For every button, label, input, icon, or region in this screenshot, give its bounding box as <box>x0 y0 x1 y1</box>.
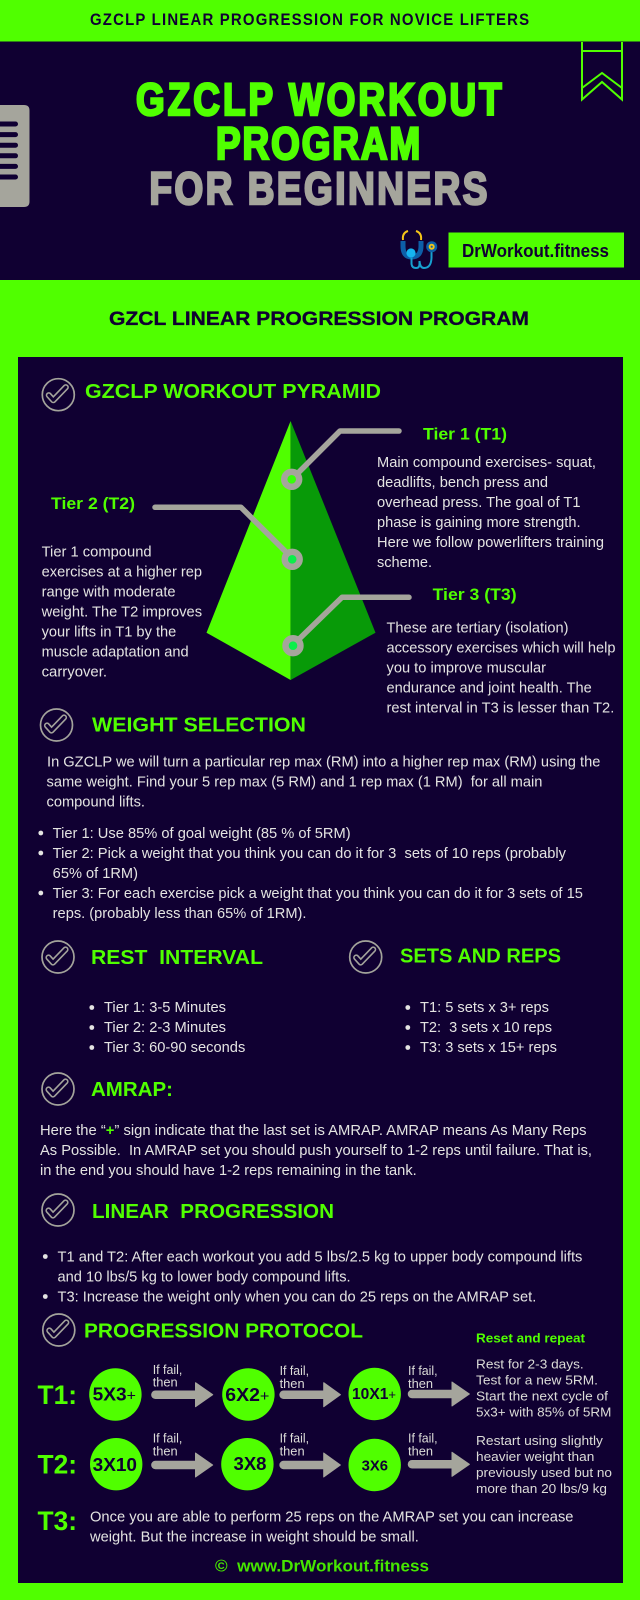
title: PROGRAM <box>216 118 420 169</box>
connector: tier 1 <box>284 431 399 487</box>
heading: AMRAP: AMRAP: <box>91 1078 173 1101</box>
section: rest interval <box>42 941 263 1056</box>
text: T2 restart: more than 20 lbs/9 kg <box>476 1481 607 1496</box>
list: rest times: Tier 3: 60-90 seconds <box>104 1040 245 1056</box>
step: 3X10 <box>90 1438 142 1490</box>
step: 3X8: 3X8 <box>234 1454 266 1474</box>
list: linear progression rules <box>43 1249 582 1305</box>
icon: check circle <box>350 941 382 973</box>
top banner <box>0 0 640 42</box>
list: rest times: Tier 2: 2-3 Minutes <box>104 1020 226 1036</box>
arrow: if fail 4: then <box>153 1444 178 1459</box>
text: tier 1 description: overhead press. The goal of T1 <box>377 495 581 511</box>
list: tier weights: Tier 2: Pick a weight that you think you can do it for 3 sets of 10 reps (probably <box>53 846 567 862</box>
section: AMRAP <box>40 1073 592 1179</box>
text: T2 restart: previously used but no <box>476 1465 612 1480</box>
list: tier weights: Tier 3: For each exercise pick a weight that you think you can do it for 3 sets of 15 <box>53 886 583 902</box>
text: tier 2 description: exercises at a higher rep <box>42 565 202 581</box>
arrow: if fail 1: then <box>153 1375 178 1390</box>
step: 3X10: 3X10 <box>93 1454 137 1475</box>
list: tier weights: reps. (probably less than 65% of 1RM). <box>53 906 307 922</box>
text: AMRAP explanation <box>40 1123 592 1179</box>
label: T3: T3: <box>38 1506 77 1536</box>
text: tier 2 description: carryover. <box>42 665 107 681</box>
website badge <box>448 232 624 268</box>
list: linear progression rules: and 10 lbs/5 kg to lower body compound lifts. <box>58 1269 351 1285</box>
text: T1 reset: Test for a new 5RM. <box>476 1373 598 1388</box>
list: sets and reps: T3: 3 sets x 15+ reps <box>420 1040 557 1056</box>
top banner: GZCLP LINEAR PROGRESSION FOR NOVICE LIFTERS <box>90 11 529 29</box>
subtitle heading: GZCL LINEAR PROGRESSION PROGRAM <box>109 308 529 330</box>
footer credit: © www.DrWorkout.fitness <box>215 1558 429 1576</box>
text: tier 2 description: Tier 1 compound <box>42 545 152 561</box>
connector: tier 2 <box>155 507 300 567</box>
step: 6X2+: 6X2+ <box>225 1385 270 1405</box>
arrow: if fail 3 <box>408 1363 469 1406</box>
arrow: if fail 3: If fail, <box>408 1363 438 1378</box>
list: linear progression rules: T3: Increase the weight only when you can do 25 reps on the AMRAP set. <box>58 1289 536 1305</box>
text: tier 2 description: muscle adaptation and <box>42 645 189 661</box>
text: tier 3 description: you to improve muscular <box>386 661 546 677</box>
label: tier 3: Tier 3 (T3) <box>433 586 517 604</box>
step: 3X6 <box>348 1439 401 1491</box>
text: tier 1 description <box>377 455 604 571</box>
heading: weight selection: WEIGHT SELECTION <box>92 714 306 737</box>
list: tier weights: Tier 1: Use 85% of goal weight (85 % of 5RM) <box>53 826 351 842</box>
arrow: if fail 6: If fail, <box>408 1431 438 1446</box>
text: weight intro <box>46 755 600 811</box>
row: T1 <box>38 1357 611 1421</box>
title <box>136 74 502 214</box>
heading: sets and reps: SETS AND REPS <box>400 945 561 968</box>
label: tier 1: Tier 1 (T1) <box>423 426 507 444</box>
step: 10X1+ <box>348 1368 401 1420</box>
main content panel <box>18 357 623 1583</box>
list: sets and reps <box>405 1000 557 1056</box>
icon: check circle <box>42 379 74 411</box>
text: tier 3 description: rest interval in T3 is lesser than T2. <box>386 701 614 717</box>
icon: check circle <box>42 1073 74 1105</box>
icon: check circle <box>42 941 74 973</box>
text: tier 3 description <box>386 621 616 717</box>
icon: check circle <box>43 1314 75 1346</box>
list: rest times <box>89 1000 245 1056</box>
text: tier 1 description: Here we follow powerlifters training <box>377 535 604 551</box>
list: linear progression rules: T1 and T2: After each workout you add 5 lbs/2.5 kg to upper body compound lifts <box>58 1249 582 1265</box>
arrow: if fail 5: If fail, <box>280 1431 309 1446</box>
step: 6X2+ <box>222 1368 275 1421</box>
arrow: if fail 1: If fail, <box>153 1362 182 1377</box>
title: GZCLP WORKOUT <box>136 74 502 125</box>
arrow: if fail 2: If fail, <box>280 1363 309 1378</box>
text: tier 3 description: endurance and joint health. The <box>386 681 592 697</box>
text: AMRAP explanation: As Possible. In AMRAP set you should push yourself to 1-2 reps until failure. That is, <box>40 1143 592 1159</box>
text: tier 2 description <box>41 545 202 681</box>
section: weight selection <box>38 709 600 922</box>
heading: linear progression: LINEAR PROGRESSION <box>92 1200 334 1223</box>
text: tier 3 description: accessory exercises which will help <box>386 641 616 657</box>
text: AMRAP explanation: Here the “+” sign indicate that the last set is AMRAP. AMRAP means As Many Reps <box>40 1123 586 1139</box>
text: tier 1 description: deadlifts, bench press and <box>377 475 548 491</box>
label: T2: T2: <box>38 1450 77 1480</box>
text: tier 2 description: your lifts in T1 by the <box>42 625 176 641</box>
step: 5X3+ <box>89 1368 142 1421</box>
step: 3X8 <box>221 1438 274 1490</box>
header panel <box>0 42 640 280</box>
heading: rest interval: REST INTERVAL <box>91 946 263 969</box>
text: tier 2 description: weight. The T2 improves <box>41 605 202 621</box>
text: T1 reset: 5x3+ with 85% of 5RM <box>476 1405 611 1420</box>
step: 3X6: 3X6 <box>362 1458 388 1475</box>
arrow: if fail 4: If fail, <box>153 1431 182 1446</box>
text: weight intro: same weight. Find your 5 rep max (5 RM) and 1 rep max (1 RM) for all main <box>46 775 542 791</box>
arrow: if fail 2: then <box>280 1376 305 1391</box>
arrow: if fail 4 <box>153 1431 213 1477</box>
section: sets and reps <box>350 941 561 1056</box>
text: tier 3 description: These are tertiary (isolation) <box>386 621 568 637</box>
title: FOR BEGINNERS <box>150 163 487 214</box>
label: T1: T1: <box>38 1380 77 1410</box>
heading: reset and repeat: Reset and repeat <box>476 1331 586 1346</box>
arrow: if fail 6: then <box>408 1444 433 1459</box>
list: rest times: Tier 1: 3-5 Minutes <box>104 1000 226 1016</box>
text: weight intro: compound lifts. <box>46 795 145 811</box>
icon: check circle <box>40 709 72 741</box>
text: tier 1 description: scheme. <box>377 555 432 571</box>
heading: pyramid: GZCLP WORKOUT PYRAMID <box>85 380 381 403</box>
section: progression protocol <box>38 1314 612 1545</box>
text: T3 rule: Once you are able to perform 25 reps on the AMRAP set you can increase <box>90 1509 574 1525</box>
text: tier 1 description: Main compound exercises- squat, <box>377 455 596 471</box>
text: T2 restart: Restart using slightly <box>476 1433 603 1448</box>
text: weight intro: In GZCLP we will turn a particular rep max (RM) into a higher rep max (RM) using the <box>47 755 600 771</box>
heading: progression protocol: PROGRESSION PROTOCOL <box>84 1320 363 1343</box>
list: sets and reps: T2: 3 sets x 10 reps <box>420 1020 552 1036</box>
row: T3 <box>38 1506 574 1545</box>
row: T2 <box>38 1431 612 1496</box>
list: tier weights <box>38 826 583 922</box>
icon: check circle <box>42 1194 74 1226</box>
icon: comb tag <box>0 105 30 207</box>
pyramid graphic <box>206 421 376 680</box>
text: T2 restart: heavier weight than <box>476 1449 594 1464</box>
step: 5X3+: 5X3+ <box>93 1385 136 1405</box>
connector: tier 3 <box>286 597 409 653</box>
text: tier 1 description: phase is gaining more strength. <box>377 515 580 531</box>
text: T1 reset <box>476 1357 611 1420</box>
arrow: if fail 3: then <box>408 1376 433 1391</box>
website badge: DrWorkout.fitness <box>462 241 609 261</box>
text: T1 reset: Start the next cycle of <box>476 1389 608 1404</box>
icon: bookmark ribbon <box>582 42 622 100</box>
text: T3 rule: weight. But the increase in weight should be small. <box>89 1529 419 1545</box>
icon: stethoscope <box>403 231 437 268</box>
list: sets and reps: T1: 5 sets x 3+ reps <box>420 1000 549 1016</box>
text: tier 2 description: range with moderate <box>42 585 176 601</box>
arrow: if fail 5 <box>280 1431 340 1477</box>
text: T1 reset: Rest for 2-3 days. <box>476 1357 584 1372</box>
label: tier 2: Tier 2 (T2) <box>51 495 135 513</box>
arrow: if fail 1 <box>153 1362 213 1407</box>
text: AMRAP explanation: in the end you should have 1-2 reps remaining in the tank. <box>40 1163 417 1179</box>
list: tier weights: 65% of 1RM) <box>53 866 138 882</box>
arrow: if fail 2 <box>280 1363 340 1407</box>
arrow: if fail 5: then <box>280 1444 305 1459</box>
section: linear progression <box>42 1194 582 1305</box>
text: T3 rule <box>89 1509 574 1545</box>
section: workout pyramid <box>41 379 616 717</box>
arrow: if fail 6 <box>408 1431 469 1476</box>
text: T2 restart <box>476 1433 612 1496</box>
step: 10X1+: 10X1+ <box>352 1386 396 1403</box>
